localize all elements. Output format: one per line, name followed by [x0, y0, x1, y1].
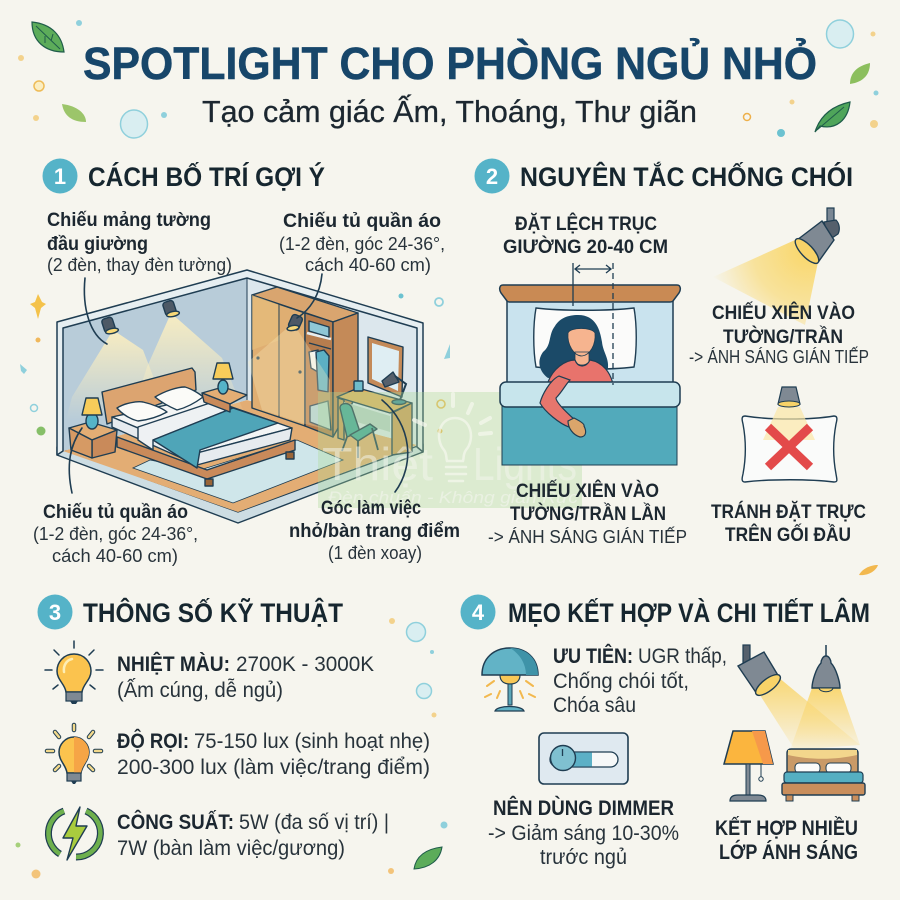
text: dimmer advice: -> Giảm sáng 10-30% — [488, 822, 679, 845]
icon: dome lamp — [482, 648, 538, 711]
section 1 heading: CÁCH BỐ TRÍ GỢI Ý — [88, 160, 325, 192]
section 3 heading: 3 — [49, 600, 61, 625]
watermark: Đèn chuẩn - Không gian Rực — [328, 488, 579, 507]
text: priority: Chóa sâu — [553, 694, 636, 717]
label: wardrobe lower — [33, 501, 198, 566]
right nightstand and lamp — [202, 363, 247, 412]
label: wardrobe lower: (1-2 đèn, góc 24-36°, — [33, 523, 198, 544]
text: wattage: 7W (bàn làm việc/gương) — [117, 837, 345, 860]
layered lights illustration — [724, 645, 865, 801]
label: layered lighting: KẾT HỢP NHIỀU — [715, 817, 858, 840]
left nightstand and lamp — [69, 398, 117, 458]
icon: pillow with red cross — [742, 387, 837, 482]
label: offset from bed axis: GIƯỜNG 20-40 CM — [503, 234, 668, 258]
label: layered lighting — [715, 817, 858, 864]
label: wardrobe top — [279, 210, 445, 275]
icon: dimmer switch — [539, 733, 628, 784]
blanket fold — [500, 382, 680, 407]
hair — [539, 315, 608, 378]
label: wall behind headboard — [47, 209, 232, 275]
label: wardrobe top: Chiếu tủ quần áo — [283, 210, 441, 232]
label: avoid above pillow — [711, 500, 866, 546]
icon: power bolt — [48, 807, 100, 860]
label: avoid above pillow: TRÊN GỐI ĐẦU — [725, 522, 851, 546]
room shell — [57, 270, 423, 523]
icon: angled spotlight — [713, 208, 839, 325]
desk lamp and pencil cup — [354, 372, 406, 404]
label: under bed: -> ÁNH SÁNG GIÁN TIẾP — [488, 526, 687, 547]
text: colour temperature: 2700K - 3000K — [236, 653, 374, 676]
teal chair — [340, 404, 378, 458]
text: colour temperature: (Ấm cúng, dễ ngủ) — [117, 679, 283, 702]
text: colour temperature: NHIỆT MÀU: — [117, 652, 230, 676]
bed top-view illustration — [500, 263, 680, 465]
label: offset from bed axis — [503, 211, 668, 258]
rug — [133, 440, 343, 503]
face and neck — [568, 328, 595, 365]
wardrobe — [248, 287, 358, 437]
label: under bed: CHIẾU XIÊN VÀO — [516, 478, 659, 502]
label: avoid above pillow: TRÁNH ĐẶT TRỰC — [711, 500, 866, 523]
text: priority — [553, 644, 727, 717]
text: wattage — [117, 810, 389, 860]
label: wall behind headboard: Chiếu mảng tường — [47, 209, 211, 231]
section 1 heading — [42, 158, 325, 194]
wall light beams — [66, 313, 247, 420]
pendant lamp — [812, 645, 840, 692]
torso — [547, 360, 614, 390]
text: illuminance: ĐỘ RỌI: — [117, 729, 189, 753]
watermark — [318, 392, 582, 508]
icon: warm bulb — [45, 641, 103, 704]
watermark: Thiệt — [322, 438, 433, 490]
text: illuminance: 200-300 lux (làm việc/trang điểm) — [117, 756, 430, 779]
label: aim at wall or ceiling: TƯỜNG/TRẦN — [723, 324, 843, 348]
text: priority: Chống chói tốt, — [553, 670, 689, 693]
label: wall behind headboard: đầu giường — [47, 233, 148, 255]
label: offset from bed axis: ĐẶT LỆCH TRỤC — [515, 211, 657, 235]
offset measure — [573, 263, 613, 385]
text: dimmer advice: NÊN DÙNG DIMMER — [493, 796, 674, 820]
label: aim at wall or ceiling: -> ÁNH SÁNG GIÁN TIẾP — [689, 346, 869, 367]
isometric bedroom illustration — [57, 270, 423, 523]
small bed — [782, 749, 865, 801]
text: illuminance — [117, 729, 430, 779]
subtitle: Tạo cảm giác Ấm, Thoáng, Thư giãn — [202, 94, 697, 129]
label: wardrobe top: cách 40-60 cm) — [305, 254, 431, 275]
label: desk corner — [289, 497, 460, 563]
label: under bed: TƯỜNG/TRẦN LẦN — [510, 501, 666, 525]
blanket lower — [502, 405, 677, 465]
bed base — [507, 300, 673, 383]
angled spot — [738, 645, 784, 699]
label: wardrobe lower: Chiếu tủ quần áo — [43, 501, 188, 523]
light beams — [758, 677, 860, 750]
table lamp — [724, 731, 773, 801]
text: wattage: 5W (đa số vị trí) | — [239, 811, 389, 834]
section 1 heading: 1 — [54, 164, 66, 189]
label: under bed — [488, 478, 687, 547]
mirror — [368, 337, 403, 397]
pillow — [534, 308, 636, 369]
text: dimmer advice — [488, 796, 679, 869]
text: dimmer advice: trước ngủ — [540, 846, 627, 869]
section 3 heading — [38, 594, 343, 630]
label: desk corner: (1 đèn xoay) — [328, 542, 422, 563]
text: illuminance: 75-150 lux (sinh hoạt nhẹ) — [194, 730, 430, 753]
bed — [102, 368, 295, 486]
watermark: Lights — [473, 438, 577, 490]
arm — [540, 376, 575, 427]
text: priority: ƯU TIÊN: — [553, 644, 633, 668]
label: wardrobe top: (1-2 đèn, góc 24-36°, — [279, 233, 445, 254]
desk — [337, 388, 412, 455]
wall spot lamps — [101, 300, 180, 335]
label: aim at wall or ceiling: CHIẾU XIÊN VÀO — [712, 300, 855, 324]
section 4 heading: 4 — [472, 600, 485, 625]
headboard — [500, 285, 680, 302]
label: desk corner: Góc làm việc — [321, 497, 421, 519]
leader lines for the room callouts — [69, 274, 408, 493]
label: wardrobe lower: cách 40-60 cm) — [52, 545, 178, 566]
text: priority: UGR thấp, — [638, 645, 727, 668]
label: wall behind headboard: (2 đèn, thay đèn tường) — [47, 254, 232, 275]
title: SPOTLIGHT CHO PHÒNG NGỦ NHỎ — [83, 38, 817, 89]
section 3 heading: THÔNG SỐ KỸ THUẬT — [83, 596, 343, 628]
section 2 heading: 2 — [486, 164, 498, 189]
label: aim at wall or ceiling — [689, 300, 869, 367]
section 2 heading: NGUYÊN TẮC CHỐNG CHÓI — [520, 160, 853, 192]
text: wattage: CÔNG SUẤT: — [117, 810, 234, 834]
hand — [568, 418, 586, 437]
text: colour temperature — [117, 652, 374, 702]
label: desk corner: nhỏ/bàn trang điểm — [289, 520, 460, 542]
icon: lux bulb — [47, 725, 101, 784]
label: layered lighting: LỚP ÁNH SÁNG — [719, 840, 858, 864]
